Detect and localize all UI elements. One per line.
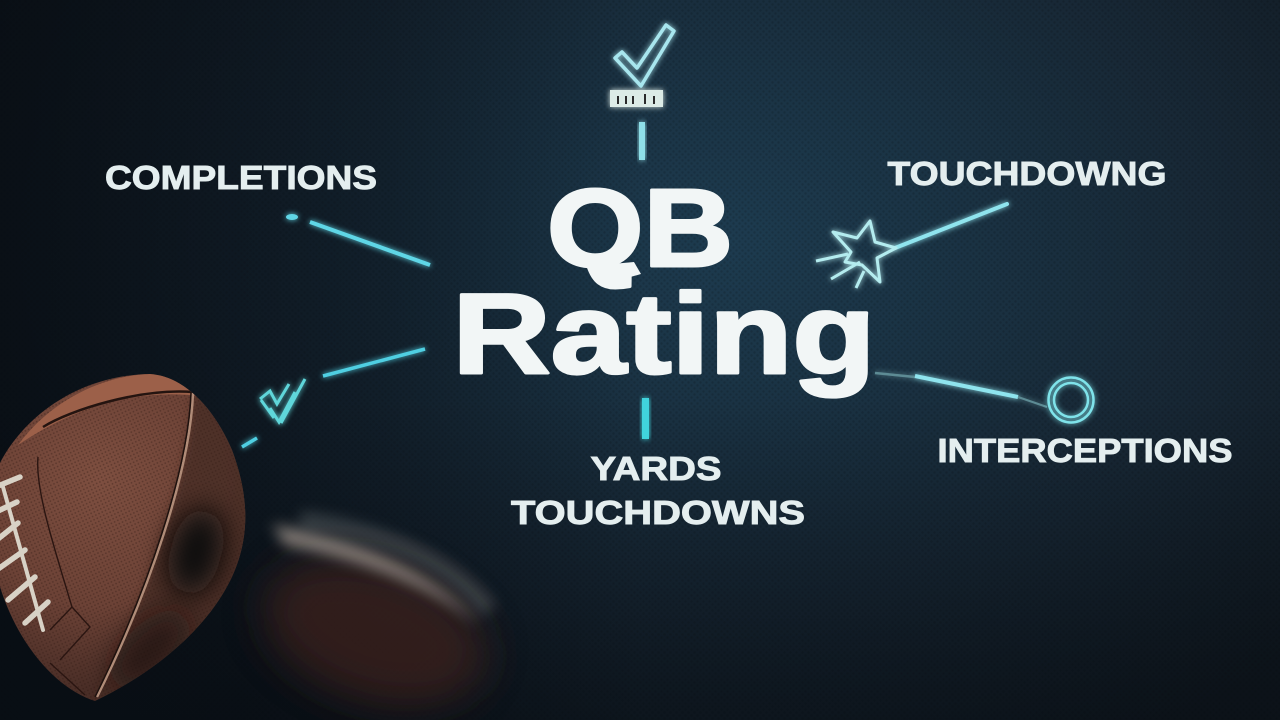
title: QB Rating: QB [547, 167, 733, 290]
label: yards touchdowns [511, 450, 805, 531]
arrow: touchdown connector [895, 204, 1007, 248]
dark shadow [159, 503, 233, 601]
title: QB Rating [452, 167, 876, 398]
arrow: bottom connector [642, 398, 649, 439]
arrow: interceptions connector [875, 373, 1047, 407]
right panel shading [108, 396, 246, 694]
title: QB Rating: Rating [452, 271, 876, 398]
icon: top check mark with box [610, 25, 674, 107]
label: yards touchdowns: YARDS [590, 450, 722, 487]
lace panel outline [38, 457, 90, 695]
label: touchdowng: TOUCHDOWNG [888, 155, 1166, 192]
football [0, 370, 260, 705]
label: interceptions: INTERCEPTIONS [938, 432, 1232, 469]
seams [43, 392, 193, 427]
arrow: top connector [639, 122, 645, 160]
motion blur ball [245, 520, 505, 720]
arrow: completions connector [286, 214, 430, 265]
icon: double ring [1048, 378, 1094, 422]
label: completions: COMPLETIONS [105, 159, 377, 196]
label: yards touchdowns: TOUCHDOWNS [511, 494, 805, 531]
icon: small double check [260, 379, 305, 423]
arrow: lower left connector [242, 349, 425, 447]
laces [0, 477, 48, 630]
top lighter panel [18, 374, 200, 445]
icon: star burst [816, 221, 896, 288]
leather texture [0, 370, 250, 705]
